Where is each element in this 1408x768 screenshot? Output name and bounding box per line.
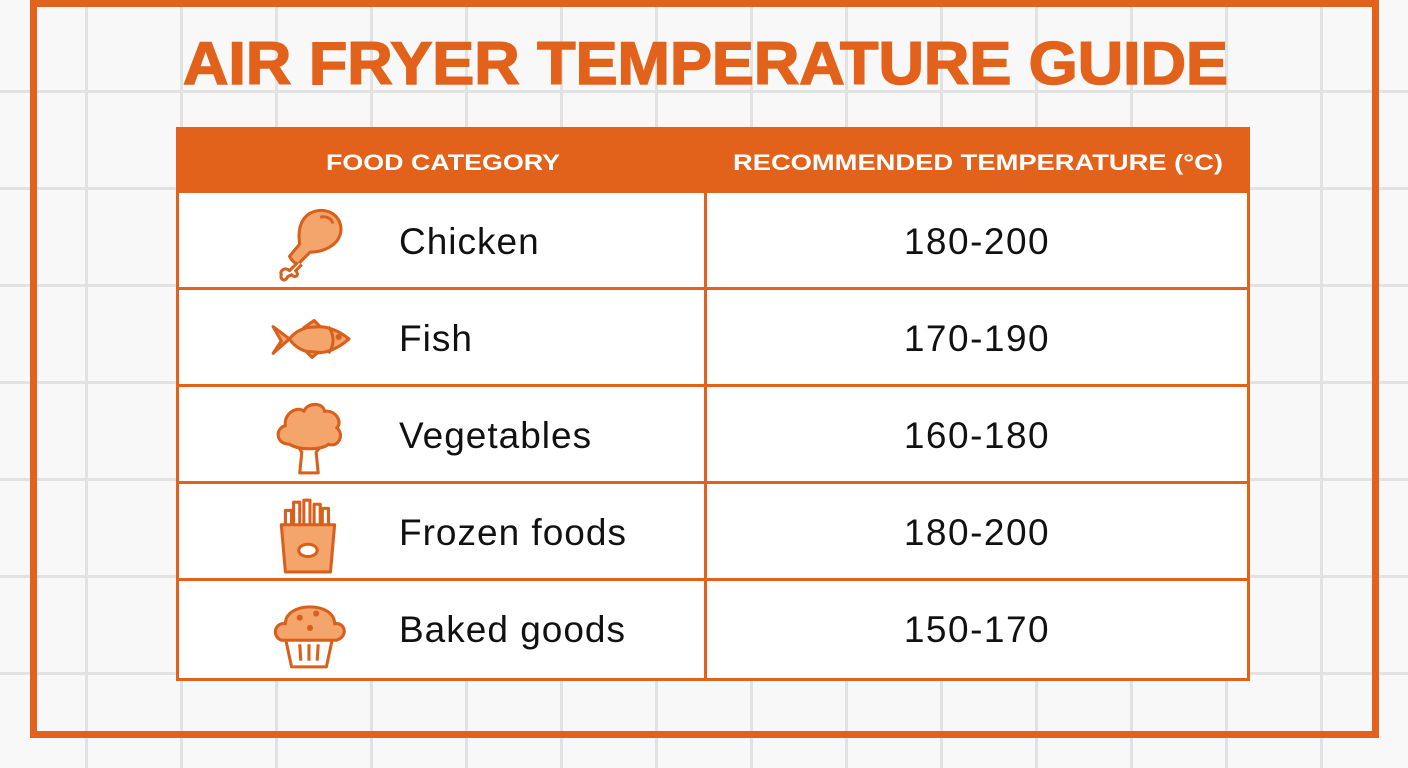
row: vegetables: 160-180 [904,415,1050,456]
row: baked goods: 150-170 [904,609,1050,650]
row: fish [179,287,1247,387]
row: fish: 170-190 [904,318,1050,359]
row: fish: Fish [399,318,473,359]
row: baked goods [179,578,1247,678]
row: vegetables: Vegetables [399,415,592,456]
icon: fries [280,498,336,574]
row: frozen foods: 180-200 [904,512,1050,553]
row: chicken: Chicken [399,221,540,262]
header row: FOOD CATEGORY [326,150,560,175]
row: chicken [179,190,1247,290]
row: baked goods: Baked goods [399,609,626,650]
row: frozen foods [179,481,1247,581]
icon: muffin [274,605,346,668]
header row: RECOMMENDED TEMPERATURE (°C) [733,150,1223,175]
row: vegetables [179,384,1247,484]
row: chicken: 180-200 [904,221,1050,262]
row: frozen foods: Frozen foods [399,512,627,553]
icon: drumstick [279,208,342,282]
icon: broccoli [276,402,342,474]
table [176,127,1250,681]
header row [179,130,1247,190]
title: AIR FRYER TEMPERATURE GUIDE [183,30,1228,97]
icon: fish [272,318,351,359]
